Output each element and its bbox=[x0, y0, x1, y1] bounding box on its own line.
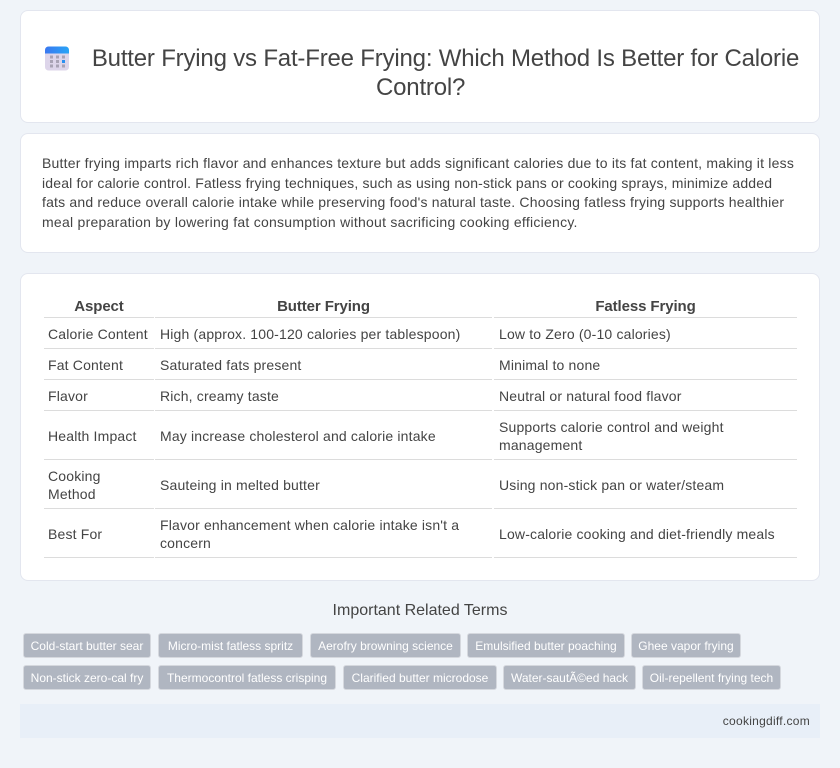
tag bbox=[310, 633, 461, 658]
tag bbox=[343, 665, 497, 690]
tag bbox=[23, 633, 151, 658]
tag: Non-stick zero-cal fry bbox=[31, 671, 143, 685]
row: calorie content: High (approx. 100-120 calories per tablespoon) bbox=[160, 326, 460, 342]
tag bbox=[158, 665, 336, 690]
intro text: meal preparation by lowering fat consumption without sacrificing cooking efficiency. bbox=[42, 214, 578, 230]
row: calorie content: Low to Zero (0-10 calories) bbox=[499, 326, 671, 342]
tag: Water-sautÃ©ed hack bbox=[511, 671, 628, 685]
table header: Aspect bbox=[74, 298, 124, 315]
row: flavor: Neutral or natural food flavor bbox=[499, 388, 682, 404]
row: health impact: Health Impact bbox=[48, 428, 137, 444]
tag bbox=[642, 665, 781, 690]
row: cooking method: Method bbox=[48, 486, 96, 502]
row: fat content: Minimal to none bbox=[499, 357, 600, 373]
table header bbox=[74, 298, 696, 315]
tag bbox=[503, 665, 636, 690]
row: best for bbox=[48, 517, 775, 551]
title bbox=[92, 45, 799, 101]
tag bbox=[631, 633, 741, 658]
row: fat content: Fat Content bbox=[48, 357, 123, 373]
table header: Fatless Frying bbox=[595, 298, 696, 315]
tag bbox=[158, 633, 303, 658]
row: best for: Best For bbox=[48, 526, 102, 542]
tag bbox=[23, 665, 151, 690]
row: cooking method bbox=[48, 468, 724, 502]
tag: Cold-start butter sear bbox=[31, 639, 143, 653]
tag bbox=[467, 633, 625, 658]
row: cooking method: Cooking bbox=[48, 468, 101, 484]
row: best for: Flavor enhancement when calorie intake isn't a bbox=[160, 517, 459, 533]
footer source: cookingdiff.com bbox=[723, 714, 810, 728]
row: cooking method: Using non-stick pan or water/steam bbox=[499, 477, 724, 493]
footer bar bbox=[20, 704, 820, 738]
row: flavor: Flavor bbox=[48, 388, 88, 404]
related terms heading: Important Related Terms bbox=[333, 602, 507, 619]
row: fat content: Saturated fats present bbox=[160, 357, 302, 373]
intro text bbox=[42, 155, 794, 230]
row: health impact bbox=[48, 419, 724, 453]
row: flavor: Rich, creamy taste bbox=[160, 388, 279, 404]
title: Control? bbox=[376, 74, 465, 101]
intro text: Butter frying imparts rich flavor and enhances texture but adds significant calories due to its fat content, making it less bbox=[42, 155, 794, 171]
tag: Emulsified butter poaching bbox=[475, 639, 617, 653]
row: calorie content: Calorie Content bbox=[48, 326, 148, 342]
row: best for: concern bbox=[160, 535, 211, 551]
row: flavor bbox=[48, 388, 682, 404]
tag: Micro-mist fatless spritz bbox=[168, 639, 293, 653]
row: health impact: management bbox=[499, 437, 582, 453]
tag: Aerofry browning science bbox=[318, 639, 453, 653]
row: best for: Low-calorie cooking and diet-friendly meals bbox=[499, 526, 775, 542]
header panel bbox=[20, 10, 820, 123]
tag: Ghee vapor frying bbox=[638, 639, 734, 653]
row: health impact: Supports calorie control and weight bbox=[499, 419, 724, 435]
intro text: ideal for calorie control. Fatless frying techniques, such as using non-stick pans or cooking sprays, minimize added bbox=[42, 175, 772, 191]
tag: Clarified butter microdose bbox=[352, 671, 488, 685]
related terms tags bbox=[23, 633, 781, 690]
table header: Butter Frying bbox=[277, 298, 370, 315]
tag: Thermocontrol fatless crisping bbox=[167, 671, 327, 685]
comparison table panel bbox=[20, 273, 820, 581]
tag: Oil-repellent frying tech bbox=[650, 671, 773, 685]
row: fat content bbox=[48, 357, 600, 373]
intro panel bbox=[20, 133, 820, 253]
title: Butter Frying vs Fat-Free Frying: Which Method Is Better for Calorie bbox=[92, 45, 799, 72]
icon: calendar bbox=[45, 46, 69, 70]
row: calorie content bbox=[48, 326, 671, 342]
row: health impact: May increase cholesterol and calorie intake bbox=[160, 428, 436, 444]
row: cooking method: Sauteing in melted butter bbox=[160, 477, 320, 493]
intro text: fats and reduce overall calorie intake while preserving food's natural taste. Choosing fatless frying supports healthier bbox=[42, 194, 784, 210]
